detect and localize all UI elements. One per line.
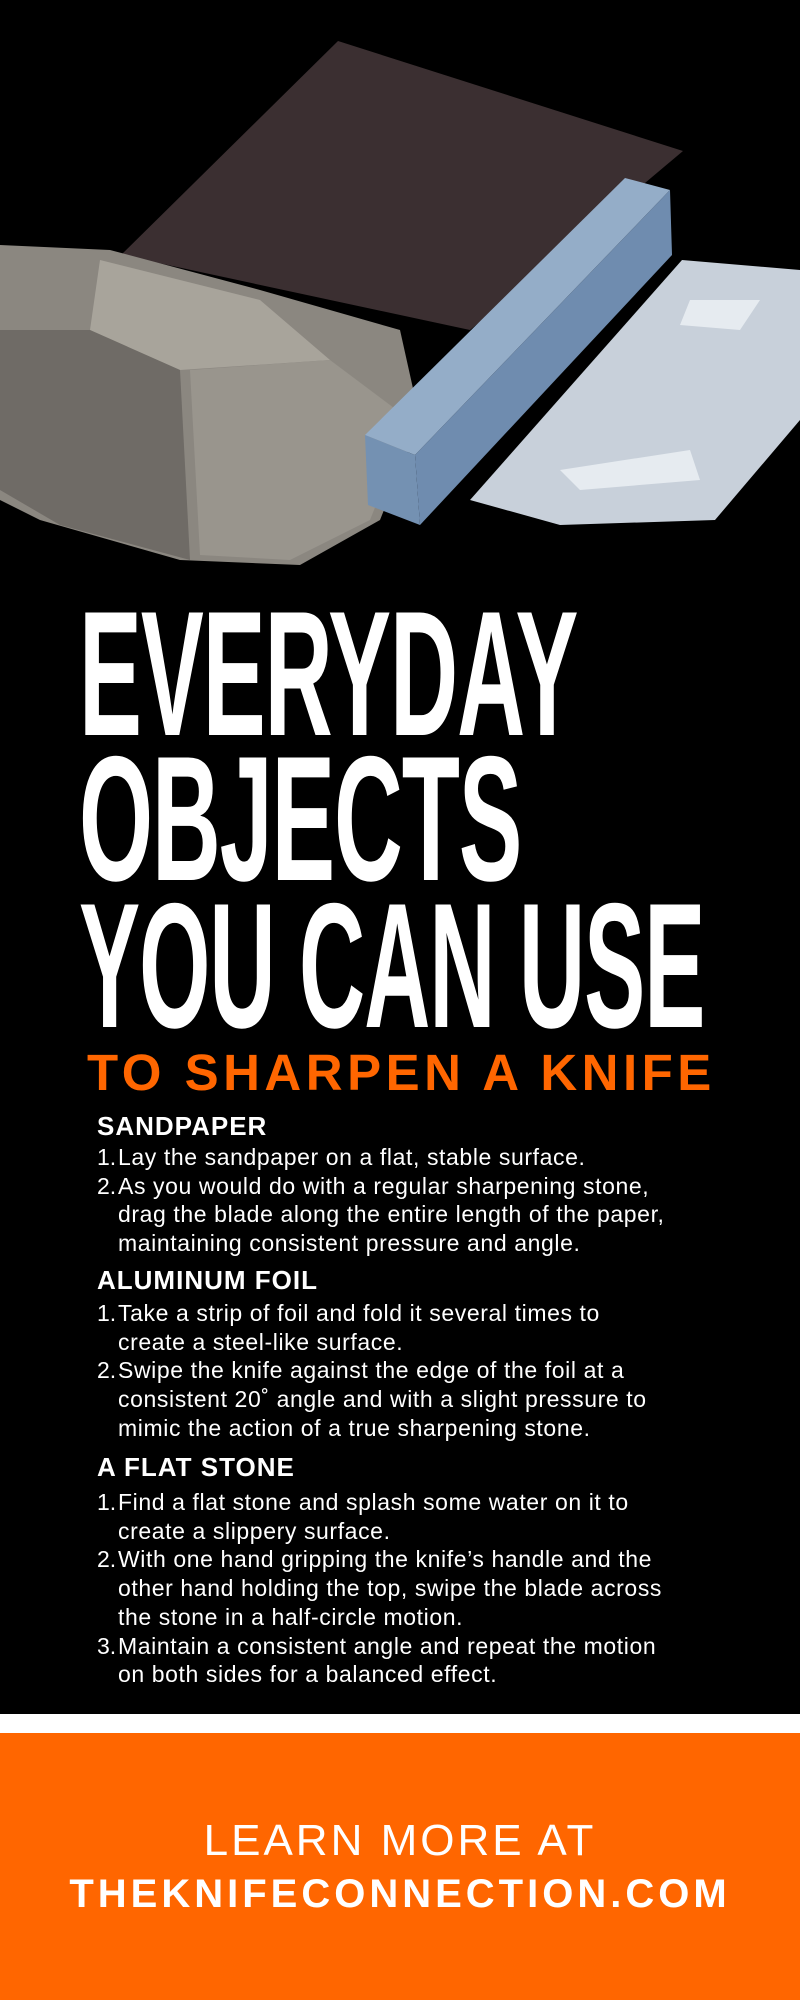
footer text: LEARN MORE AT	[204, 1816, 596, 1865]
list: aluminum foil: Swipe the knife against the edge of the foil at a consistent 20˚ angle and with a slight pressure to mimic the action of a true sharpening stone.	[118, 1357, 647, 1441]
title	[79, 574, 704, 1065]
footer text	[69, 1816, 731, 1916]
heading: a flat stone: A FLAT STONE	[97, 1452, 295, 1482]
illustration: sharpening objects	[0, 41, 800, 565]
list: a flat stone: Maintain a consistent angle and repeat the motion on both sides for a balanced effect.	[118, 1633, 656, 1687]
subtitle: TO SHARPEN A KNIFE	[87, 1044, 716, 1101]
aluminum foil	[470, 260, 800, 525]
list: a flat stone: 3.	[97, 1633, 116, 1659]
title: OBJECTS	[79, 719, 521, 918]
list: aluminum foil: Take a strip of foil and fold it several times to create a steel-like surface.	[118, 1300, 600, 1355]
list: a flat stone: Find a flat stone and splash some water on it to create a slippery surface.	[118, 1489, 629, 1544]
list: sandpaper: Lay the sandpaper on a flat, stable surface.	[118, 1144, 586, 1170]
list: aluminum foil: 1.	[97, 1300, 116, 1326]
heading: sandpaper: SANDPAPER	[97, 1111, 267, 1141]
list: a flat stone: With one hand gripping the knife’s handle and the other hand holding the top, swipe the blade across the stone in a half-circle motion.	[118, 1546, 662, 1630]
list: aluminum foil: 2.	[97, 1357, 116, 1383]
list: sandpaper: 2.	[97, 1173, 116, 1199]
footer	[0, 1714, 800, 2000]
footer text: THEKNIFECONNECTION.COM	[69, 1872, 731, 1916]
list: a flat stone: 1.	[97, 1489, 116, 1515]
title: YOU CAN USE	[79, 866, 704, 1065]
list: aluminum foil	[97, 1300, 647, 1441]
rock	[0, 245, 420, 565]
title: EVERYDAY	[79, 574, 577, 773]
list: sandpaper: As you would do with a regular sharpening stone, drag the blade along the entire length of the paper, maintaining consistent pressure and angle.	[118, 1173, 665, 1256]
sharpening stone	[365, 178, 672, 525]
list: a flat stone	[97, 1489, 662, 1687]
sandpaper	[121, 41, 683, 330]
list: sandpaper: 1.	[97, 1144, 116, 1170]
list: a flat stone: 2.	[97, 1546, 116, 1572]
heading: aluminum foil: ALUMINUM FOIL	[97, 1265, 318, 1295]
